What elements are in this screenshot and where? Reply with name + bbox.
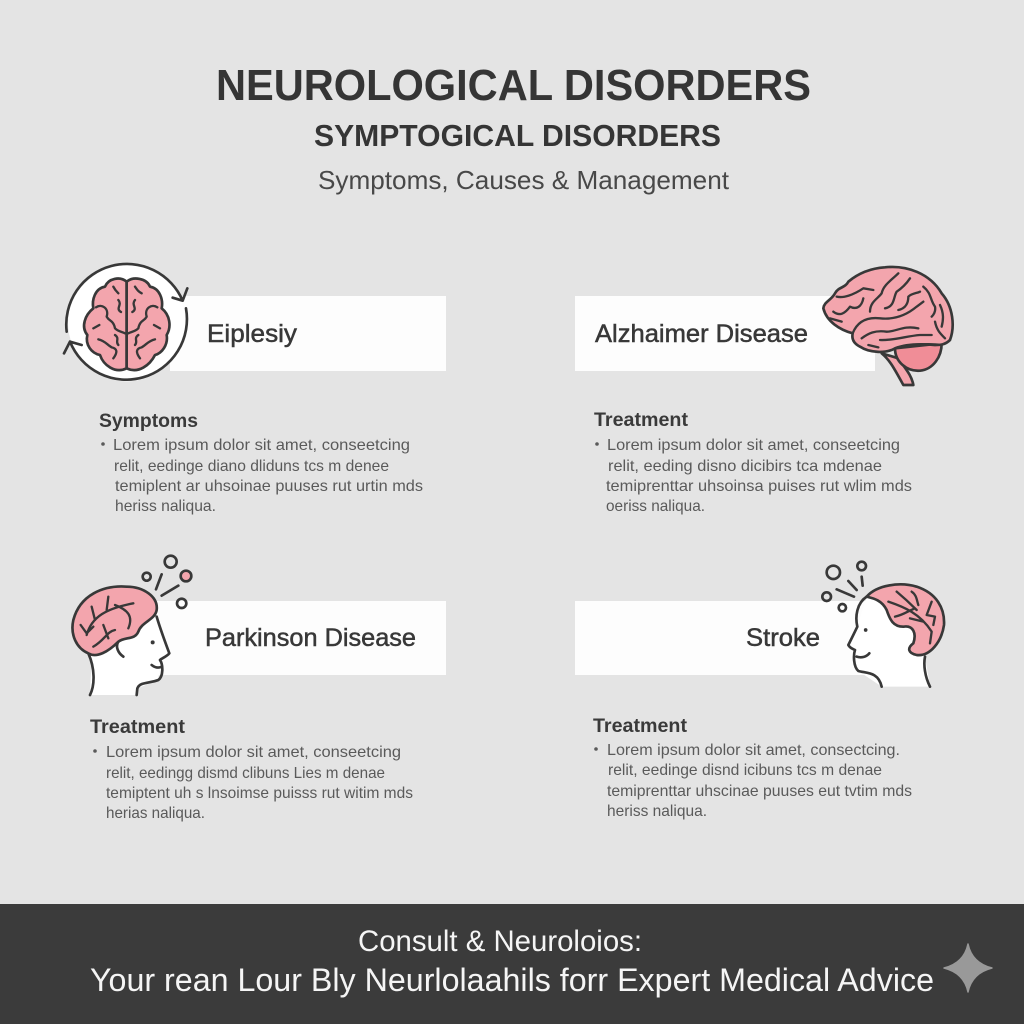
title: NEUROLOGICAL DISORDERS [216, 61, 811, 110]
bullet text: epilepsy: heriss naliqua. [115, 498, 216, 515]
bullet text: alzheimer [595, 437, 912, 515]
heading: symptoms: Symptoms [99, 411, 198, 432]
subtitle: SYMPTOGICAL DISORDERS [314, 118, 721, 153]
bullet text: stroke: Lorem ipsum dolor sit amet, consectcing. [607, 742, 900, 759]
bullet text: alzheimer: Lorem ipsum dolor sit amet, conseetcing [607, 437, 900, 454]
bullet text: parkinson [93, 744, 413, 822]
icon: brain in cycle arrows [64, 264, 187, 381]
bullet text: epilepsy [101, 437, 423, 515]
bullet text: alzheimer: relit, eeding disno dicibirs tca mdenae [608, 458, 882, 475]
heading: treatment: Treatment [594, 410, 689, 431]
bullet text: alzheimer: temiprenttar uhsoinsa puises rut wlim mds [606, 478, 912, 495]
tagline: Symptoms, Causes & Management [318, 165, 730, 195]
header bar: stroke [575, 601, 875, 675]
panel: epilepsy [64, 264, 446, 515]
bullet text: epilepsy: temiplent ar uhsoinae puuses rut urtin mds [115, 478, 423, 495]
footer text: Consult & Neuroloios: [358, 925, 642, 958]
disease name: parkinson: Parkinson Disease [205, 624, 416, 652]
bullet text: parkinson: relit, eedingg dismd clibuns Lies m denae [106, 765, 385, 782]
footer text: Your rean Lour Bly Neurlolaahils forr Expert Medical Advice [90, 962, 934, 998]
heading: treatment: Treatment [593, 716, 688, 737]
header bar: epilepsy [170, 296, 446, 371]
bullet text: epilepsy: relit, eedinge diano dliduns tcs m denee [114, 458, 389, 475]
bullet text: epilepsy: Lorem ipsum dolor sit amet, conseetcing [113, 437, 410, 454]
panel: alzheimer [575, 267, 953, 515]
disease name: epilepsy: Eiplesiy [207, 320, 298, 348]
bullet text: parkinson: temiptent uh s lnsoimse puisss rut witim mds [106, 785, 413, 802]
footer banner [0, 904, 1024, 1024]
icon: head with brain, side view facing right [72, 556, 191, 695]
icon: head with brain, side view facing left [822, 562, 944, 687]
bullet text: stroke: heriss naliqua. [607, 803, 707, 820]
bullet text: alzheimer: oeriss naliqua. [606, 498, 705, 515]
bullet text: stroke: relit, eedinge disnd icibuns tcs m denae [608, 762, 882, 779]
bullet text: parkinson: Lorem ipsum dolor sit amet, conseetcing [106, 744, 401, 761]
bullet text: stroke [594, 742, 912, 820]
bullet text: stroke: temiprenttar uhscinae puuses eut tvtim mds [607, 783, 912, 800]
header bar: parkinson [150, 601, 446, 675]
footer text [90, 925, 934, 998]
icon: four-point star [944, 944, 992, 992]
heading: treatment: Treatment [90, 717, 186, 738]
disease name: alzheimer: Alzhaimer Disease [595, 320, 808, 348]
panel: stroke [575, 562, 944, 820]
disease name: stroke: Stroke [746, 624, 820, 652]
panel: parkinson [72, 556, 446, 822]
header bar: alzheimer [575, 296, 875, 371]
icon: brain side view [823, 267, 953, 385]
bullet text: parkinson: herias naliqua. [106, 805, 205, 822]
